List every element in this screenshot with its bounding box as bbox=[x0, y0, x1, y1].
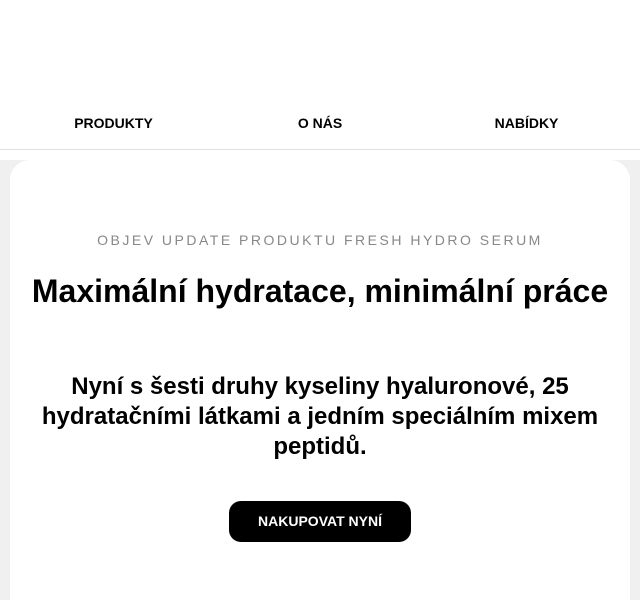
nav link: o nás: O NÁS bbox=[298, 115, 342, 131]
body text: Nyní s šesti druhy kyseliny hyaluronové, 25 bbox=[71, 373, 569, 400]
button: nakupovat nyní: NAKUPOVAT NYNÍ bbox=[258, 513, 382, 529]
navigation bar bbox=[0, 0, 640, 150]
panel: hero card bbox=[10, 160, 630, 600]
body text bbox=[42, 373, 598, 460]
body text: hydratačními látkami a jedním speciálním mixem bbox=[42, 403, 598, 430]
body text: peptidů. bbox=[273, 433, 367, 460]
eyebrow text: OBJEV UPDATE PRODUKTU FRESH HYDRO SERUM bbox=[97, 232, 543, 248]
page background bbox=[0, 160, 640, 600]
heading: Maximální hydratace, minimální práce bbox=[32, 273, 608, 309]
button: nakupovat nyní bbox=[229, 501, 411, 542]
nav link: nabídky: NABÍDKY bbox=[495, 115, 558, 131]
nav link: produkty: PRODUKTY bbox=[74, 115, 153, 131]
